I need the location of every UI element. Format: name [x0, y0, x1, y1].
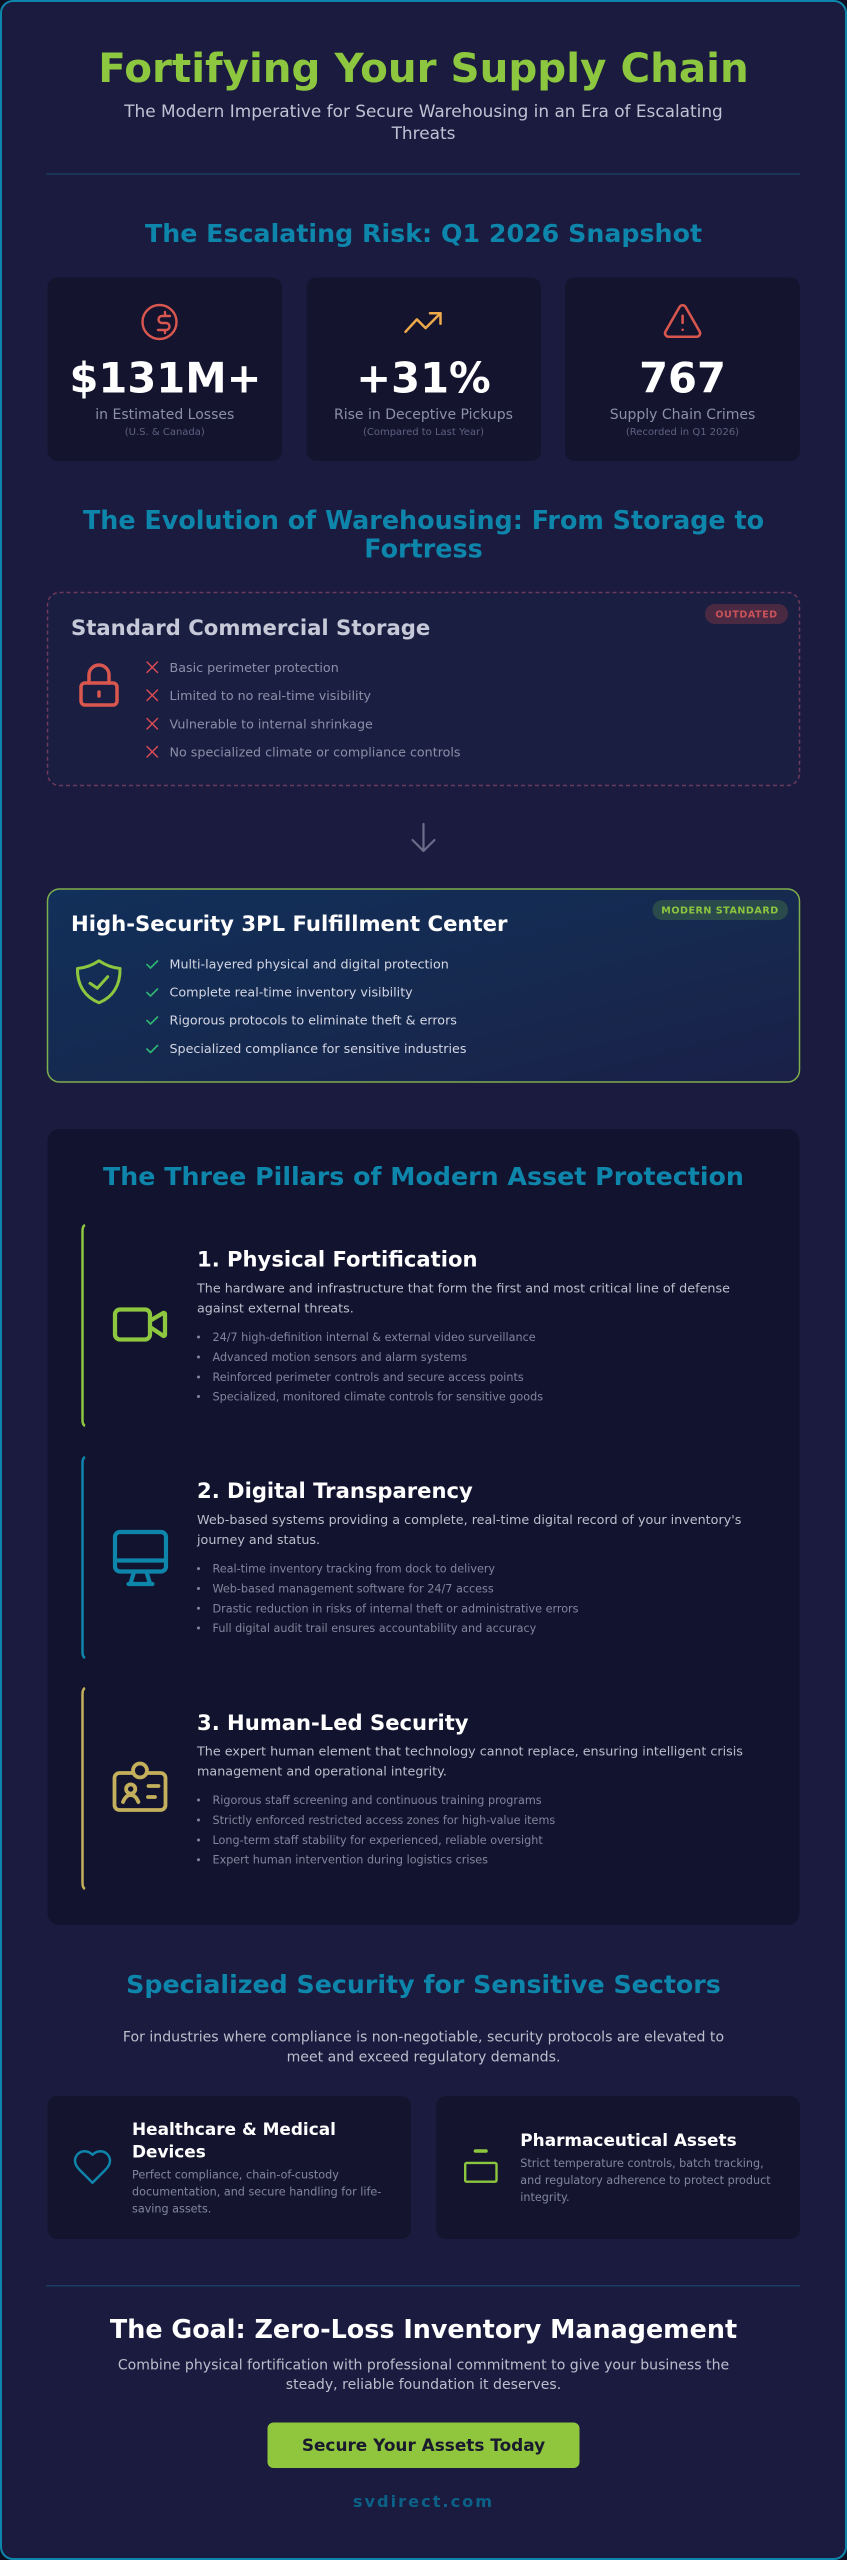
value: $131M+: [69, 354, 262, 402]
bullet list: Advanced motion sensors and alarm systems: [212, 1351, 467, 1364]
bullet list: [197, 1331, 543, 1404]
icon: shield check: [77, 961, 120, 1003]
heading: [83, 505, 764, 564]
card: pharmaceutical: [436, 2096, 800, 2239]
stat card: losses: [48, 278, 282, 461]
sublabel: (Compared to Last Year): [363, 427, 484, 438]
stat card: crimes: [565, 278, 800, 461]
section: sensitive sectors: [48, 1970, 800, 2239]
card text: Perfect compliance, chain-of-custody: [132, 2168, 339, 2181]
pillar 2: [82, 1457, 742, 1658]
icon: heart: [75, 2151, 110, 2183]
list: strengths: Specialized compliance for sensitive industries: [170, 1041, 466, 1056]
icon: video camera: [115, 1310, 165, 1340]
description: Web-based systems providing a complete, real-time digital record of your inventory's: [197, 1513, 742, 1528]
goal text: [118, 2358, 729, 2393]
bullet list: Web-based management software for 24/7 access: [212, 1582, 494, 1596]
pillar title: 1. Physical Fortification: [197, 1246, 478, 1272]
icon: trending up: [406, 313, 440, 332]
sublabel: (Recorded in Q1 2026): [626, 427, 739, 438]
panel: standard storage: [48, 592, 800, 786]
heading: The Three Pillars of Modern Asset Protection: [103, 1162, 744, 1191]
goal text: Combine physical fortification with professional commitment to give your business the: [118, 2358, 729, 2374]
description: The hardware and infrastructure that form the first and most critical line of defense: [196, 1282, 730, 1296]
list: strengths: [147, 956, 466, 1056]
panel: three pillars: [48, 1129, 800, 1925]
card title: Pharmaceutical Assets: [520, 2130, 737, 2150]
list: weaknesses: Basic perimeter protection: [170, 660, 339, 675]
heading: Specialized Security for Sensitive Sectors: [126, 1970, 721, 1999]
bullet list: Strictly enforced restricted access zones for high-value items: [212, 1814, 555, 1827]
bullet list: Rigorous staff screening and continuous training programs: [212, 1794, 542, 1807]
card text: saving assets.: [132, 2202, 211, 2215]
pillar 1: [82, 1225, 730, 1426]
heading: Fortress: [364, 534, 483, 564]
bullet list: Specialized, monitored climate controls for sensitive goods: [212, 1390, 543, 1404]
pillar 3: [82, 1688, 743, 1889]
header: [98, 44, 749, 143]
list: strengths: Complete real-time inventory visibility: [170, 984, 413, 1000]
card text: Strict temperature controls, batch tracking,: [520, 2157, 764, 2170]
subtitle: Threats: [391, 123, 455, 143]
card text: documentation, and secure handling for life-: [132, 2185, 381, 2198]
badge: outdated: [705, 604, 788, 624]
card text: [520, 2157, 771, 2204]
bullet list: Reinforced perimeter controls and secure access points: [212, 1371, 524, 1384]
list: weaknesses: [147, 660, 461, 760]
icon: monitor: [115, 1532, 166, 1584]
card text: [132, 2168, 381, 2215]
label: in Estimated Losses: [95, 407, 234, 423]
bullet list: Expert human intervention during logistics crises: [212, 1854, 488, 1867]
list: strengths: Multi-layered physical and digital protection: [170, 956, 449, 972]
description: [196, 1513, 742, 1548]
section: goal and call to action: [110, 2314, 737, 2511]
subtitle: The Modern Imperative for Secure Warehousing in an Era of Escalating: [123, 101, 723, 121]
icon: dollar: [142, 305, 176, 339]
card title: [132, 2119, 336, 2162]
card text: and regulatory adherence to protect product: [520, 2174, 771, 2187]
icon: lock: [81, 665, 117, 705]
badge: outdated: OUTDATED: [715, 610, 778, 620]
list: weaknesses: Vulnerable to internal shrinkage: [170, 716, 373, 732]
button: [268, 2422, 580, 2468]
bullet list: Long-term staff stability for experienced, reliable oversight: [212, 1834, 543, 1847]
badge: modern standard: MODERN STANDARD: [661, 906, 779, 916]
icon: id badge: [114, 1764, 166, 1810]
label: Rise in Deceptive Pickups: [334, 407, 513, 423]
panel title: Standard Commercial Storage: [71, 615, 430, 640]
intro text: meet and exceed regulatory demands.: [287, 2050, 560, 2066]
list: weaknesses: Limited to no real-time visibility: [170, 688, 372, 703]
subtitle: [123, 101, 723, 143]
bullet list: Real-time inventory tracking from dock to delivery: [212, 1563, 495, 1576]
label: Supply Chain Crimes: [610, 407, 755, 423]
heading: The Evolution of Warehousing: From Storage to: [83, 505, 764, 535]
section: escalating risk: [48, 219, 800, 461]
description: The expert human element that technology cannot replace, ensuring intelligent crisis: [196, 1744, 743, 1760]
title: Fortifying Your Supply Chain: [98, 44, 749, 92]
description: journey and status.: [196, 1533, 320, 1548]
card title: Devices: [132, 2142, 206, 2162]
website: svdirect.com: [353, 2492, 494, 2511]
card title: Healthcare & Medical: [132, 2119, 336, 2139]
description: [196, 1282, 730, 1316]
heading: The Escalating Risk: Q1 2026 Snapshot: [145, 219, 702, 248]
description: [196, 1744, 743, 1780]
value: +31%: [356, 354, 491, 402]
card: healthcare: [48, 2096, 411, 2239]
button: Secure Your Assets Today: [302, 2435, 545, 2455]
sublabel: (U.S. & Canada): [125, 427, 205, 438]
intro text: For industries where compliance is non-negotiable, security protocols are elevated to: [123, 2030, 724, 2046]
arrow: [412, 824, 434, 851]
description: management and operational integrity.: [197, 1764, 447, 1780]
pillar title: 2. Digital Transparency: [197, 1478, 473, 1503]
icon: warning: [665, 305, 700, 337]
panel: high-security center: [48, 889, 800, 1082]
intro text: [123, 2030, 724, 2066]
section: evolution: [48, 505, 800, 1082]
bullet list: [197, 1794, 555, 1867]
panel title: High-Security 3PL Fulfillment Center: [71, 911, 508, 936]
bullet list: [197, 1563, 579, 1635]
card text: integrity.: [520, 2191, 570, 2204]
bullet list: 24/7 high-definition internal & external video surveillance: [212, 1331, 536, 1344]
description: against external threats.: [197, 1302, 354, 1316]
bullet list: Drastic reduction in risks of internal theft or administrative errors: [212, 1602, 579, 1615]
list: weaknesses: No specialized climate or compliance controls: [170, 744, 461, 760]
icon: pharma bottle: [465, 2151, 496, 2182]
badge: modern standard: [652, 900, 788, 920]
heading: The Goal: Zero-Loss Inventory Management: [110, 2314, 737, 2344]
value: 767: [639, 354, 726, 402]
stat card: pickups: [306, 278, 541, 461]
list: strengths: Rigorous protocols to eliminate theft & errors: [170, 1012, 457, 1028]
pillar title: 3. Human-Led Security: [197, 1710, 469, 1735]
goal text: steady, reliable foundation it deserves.: [286, 2377, 561, 2393]
bullet list: Full digital audit trail ensures accountability and accuracy: [212, 1622, 537, 1635]
